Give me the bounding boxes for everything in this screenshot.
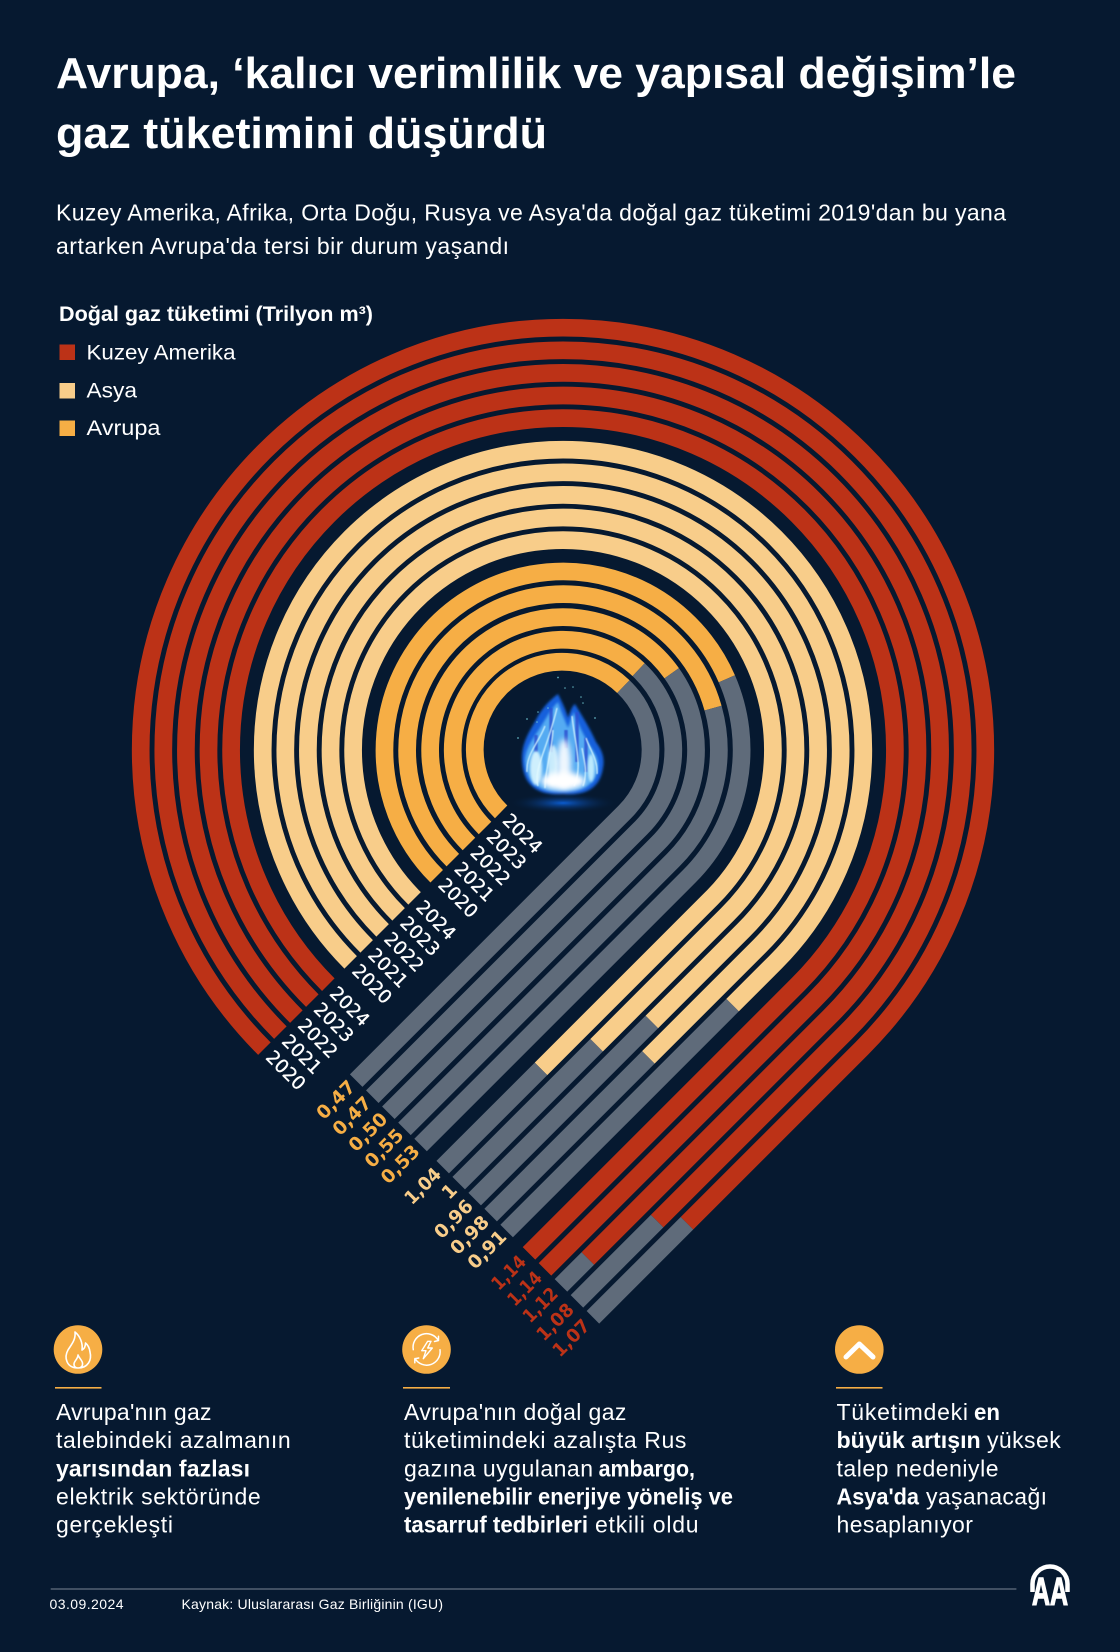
text block 1: talebindeki azalmanın	[56, 1427, 291, 1453]
values: Kuzey Amerika: 1,07	[549, 1316, 595, 1362]
ring Asya 2024	[146, 453, 860, 1167]
legend item: Avrupa: Avrupa	[86, 417, 161, 440]
text block 3: büyük artışın	[836, 1427, 981, 1453]
ring Kuzey Amerika 2024	[60, 281, 1032, 1253]
year labels: 2020	[261, 1047, 309, 1095]
year labels: 2022	[293, 1015, 341, 1063]
text block 1	[56, 1399, 291, 1538]
values: Kuzey Amerika: 1,14	[504, 1268, 547, 1311]
text block 2: tasarruf tedbirleri	[404, 1512, 588, 1538]
year labels: 2021	[277, 1031, 325, 1079]
year labels: 2024	[498, 810, 546, 858]
values: Avrupa: 0,47	[329, 1093, 376, 1140]
ring Asya 2021	[98, 357, 956, 1215]
text block 2	[404, 1399, 733, 1538]
year labels: 2023	[395, 913, 443, 961]
ring Asya 2020	[82, 325, 988, 1231]
rings: Avrupa	[168, 498, 816, 1145]
icon: chevron up	[835, 1325, 884, 1374]
rings: Kuzey Amerika	[0, 153, 1120, 1347]
values: Asya: 1	[438, 1180, 462, 1204]
text block 2: Avrupa'nın doğal gaz	[404, 1399, 626, 1425]
text block 3	[836, 1399, 1061, 1538]
values: Asya: 0,98	[446, 1212, 494, 1259]
text block 3: Tüketimdeki	[836, 1399, 968, 1425]
ring Kuzey Amerika 2023	[44, 249, 1064, 1269]
year labels: 2020	[434, 875, 482, 923]
text block 2: ambargo,	[599, 1456, 695, 1482]
icon: flame	[54, 1325, 102, 1374]
ring Avrupa 2021	[184, 530, 783, 1129]
ring Avrupa 2023	[216, 594, 719, 1097]
text block 3: Asya'da	[836, 1484, 919, 1510]
values: Asya: 0,91	[464, 1226, 511, 1274]
year labels: 2021	[450, 858, 498, 906]
year labels	[261, 810, 546, 1095]
icon: blue flame	[509, 677, 617, 813]
info block 1	[54, 1325, 291, 1538]
info block 3	[835, 1325, 1061, 1538]
values: Kuzey Amerika: 1,14	[488, 1252, 531, 1295]
info block 2	[402, 1325, 733, 1538]
text block 2: gazına uygulanan	[404, 1456, 593, 1482]
year labels: 2020	[347, 961, 396, 1009]
values: Kuzey Amerika: 1,12	[519, 1284, 563, 1327]
ring Avrupa 2024	[232, 626, 687, 1081]
text block 3: yüksek	[987, 1427, 1061, 1453]
text block 2: etkili oldu	[595, 1512, 699, 1538]
values: Kuzey Amerika: 1,08	[533, 1300, 579, 1346]
legend item: Asya: Asya	[86, 380, 137, 402]
text block 3: hesaplanıyor	[836, 1512, 973, 1538]
legend title: Doğal gaz tüketimi (Trilyon m³)	[59, 303, 373, 326]
text block 1: gerçekleşti	[56, 1512, 173, 1538]
title	[56, 49, 1016, 158]
title: Avrupa, ‘kalıcı verimlilik ve yapısal değişim’le	[56, 49, 1016, 98]
values: Avrupa: 0,50	[345, 1109, 392, 1156]
year labels: 2024	[325, 983, 373, 1031]
footer date: 03.09.2024	[50, 1596, 124, 1612]
values: Avrupa: 0,53	[377, 1141, 424, 1188]
year labels: 2022	[379, 929, 428, 977]
legend item: Asya	[60, 380, 137, 402]
radial bar chart	[0, 153, 1120, 1363]
subtitle	[56, 200, 1006, 259]
values: Kuzey Amerika	[485, 1252, 595, 1362]
values: Asya	[399, 1163, 511, 1275]
year labels: 2024	[411, 897, 459, 945]
ring Kuzey Amerika 2020	[0, 153, 1120, 1347]
text block 1: yarısından fazlası	[56, 1456, 250, 1482]
icon: energy	[402, 1325, 451, 1374]
values: Avrupa: 0,47	[313, 1077, 360, 1124]
title: gaz tüketimini düşürdü	[56, 109, 547, 158]
text block 1: Avrupa'nın gaz	[56, 1399, 212, 1425]
legend	[59, 303, 373, 440]
footer source: Kaynak: Uluslararası Gaz Birliğinin (IGU)	[182, 1596, 443, 1612]
text block 2: tüketimindeki azalışta Rus	[404, 1427, 686, 1453]
legend item: Avrupa	[60, 417, 161, 440]
logo: AA	[1032, 1567, 1068, 1614]
subtitle: artarken Avrupa'da tersi bir durum yaşandı	[56, 233, 509, 259]
text block 3: en	[974, 1399, 1000, 1425]
year labels: 2023	[482, 826, 530, 874]
ring Kuzey Amerika 2022	[28, 217, 1096, 1285]
year labels: 2023	[309, 999, 357, 1047]
ring Asya 2023	[130, 421, 892, 1183]
text block 3: talep nedeniyle	[836, 1456, 998, 1482]
legend item: Kuzey Amerika: Kuzey Amerika	[86, 342, 236, 364]
text block 1: elektrik sektöründe	[56, 1484, 261, 1510]
text block 2: yenilenebilir enerjiye yöneliş ve	[404, 1484, 733, 1510]
values: Avrupa	[313, 1077, 424, 1188]
ring Avrupa 2022	[200, 562, 751, 1113]
ring Kuzey Amerika 2021	[0, 185, 1120, 1315]
values: Avrupa: 0,55	[361, 1125, 408, 1172]
ring Avrupa 2020	[168, 498, 816, 1145]
values: Asya: 1,04	[401, 1164, 446, 1209]
subtitle: Kuzey Amerika, Afrika, Orta Doğu, Rusya ve Asya'da doğal gaz tüketimi 2019'dan bu yana	[56, 200, 1006, 226]
year labels: 2022	[466, 842, 514, 890]
ring Asya 2022	[114, 389, 924, 1199]
rings: Asya	[82, 325, 988, 1231]
logo: AA: AA	[1032, 1571, 1068, 1614]
footer rule	[51, 1588, 1016, 1590]
year labels: 2021	[363, 945, 412, 993]
values: Asya: 0,96	[430, 1196, 478, 1243]
text block 3: yaşanacağı	[926, 1484, 1047, 1510]
